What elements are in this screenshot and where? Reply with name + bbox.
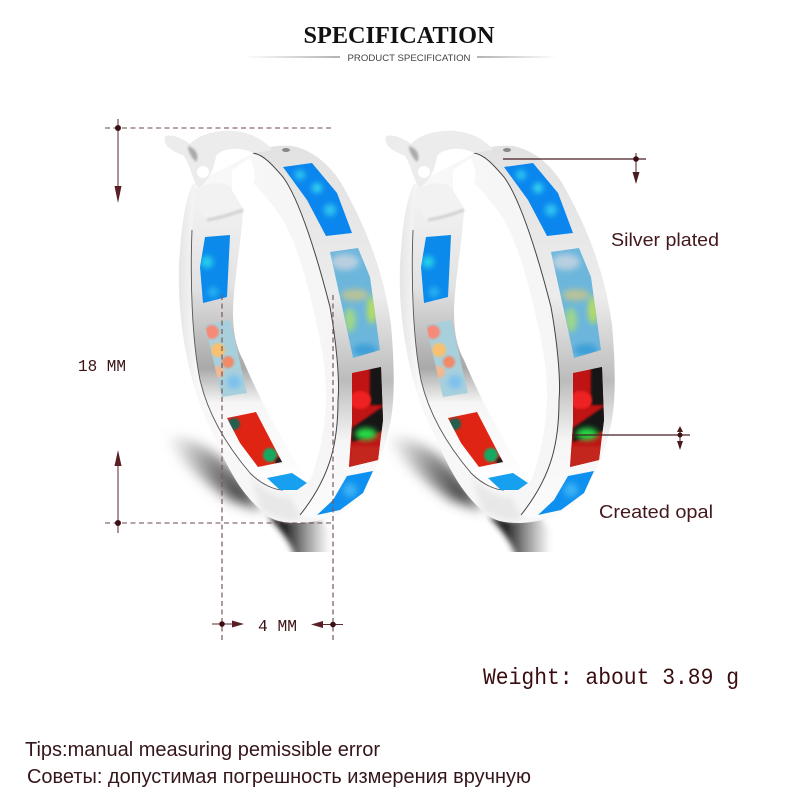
callout: created opal (572, 426, 713, 522)
title: SPECIFICATION (304, 23, 495, 49)
icon: right opal hoop earring (386, 131, 615, 560)
dimension: height 18 MM (78, 119, 333, 533)
tips: russian: Советы: допустимая погрешность измерения вручную (27, 766, 531, 788)
icon: left opal hoop earring (165, 131, 394, 560)
callout: silver plated: Silver plated (611, 230, 719, 250)
dimension: width 4 MM (212, 295, 343, 640)
subtitle: product specification: PRODUCT SPECIFICATION (348, 53, 471, 64)
dimension: height 18 MM: 18 MM (78, 358, 126, 377)
weight text: Weight: about 3.89 g (483, 665, 739, 691)
tips: english: Tips:manual measuring pemissible error (25, 739, 380, 761)
dimension: width 4 MM: 4 MM (258, 618, 297, 637)
callout: silver plated (503, 153, 719, 250)
callout: created opal: Created opal (599, 502, 713, 522)
